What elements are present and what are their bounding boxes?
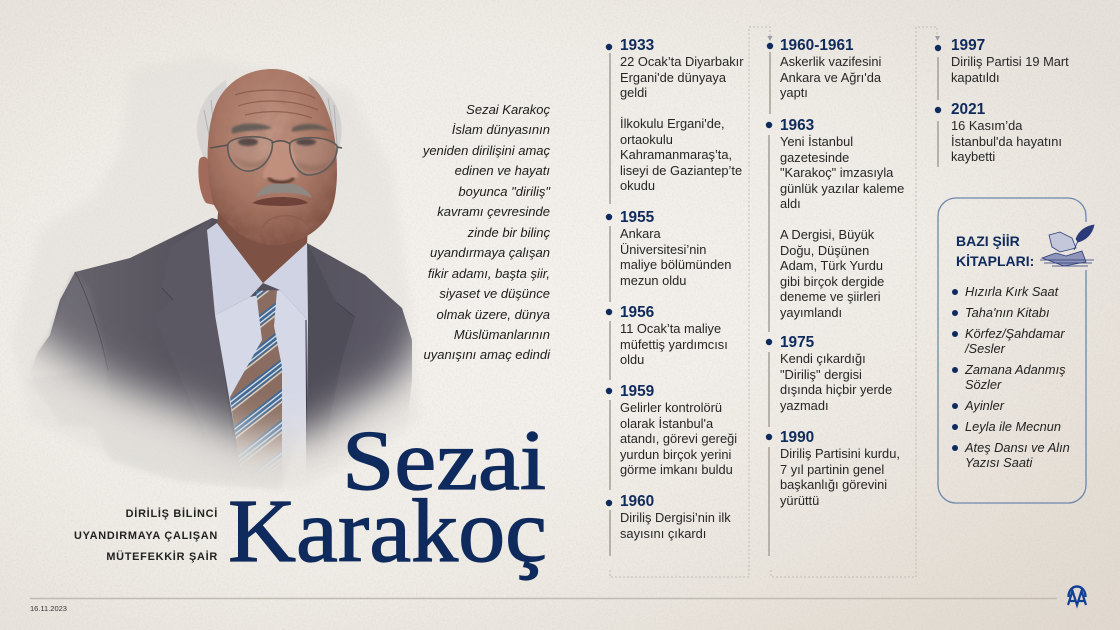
quote text: yeniden dirilişini amaç: [423, 143, 550, 158]
event 1963: aldı: [780, 196, 801, 211]
event 1975: Kendi çıkardığı: [780, 351, 866, 366]
event 1975: yazmadı: [780, 398, 829, 412]
event 1960-1961: Ankara ve Ağrı'da: [780, 70, 881, 84]
panel heading: BAZI ŞİİR: [956, 233, 1020, 249]
event 1956: 11 Ocak’ta maliye: [620, 321, 721, 336]
text: Zamana Adanmış: [965, 362, 1066, 377]
event 1997: [951, 37, 1069, 84]
event 1960-1961: 1960-1961: [780, 37, 854, 54]
event 1959: olarak İstanbul'a: [620, 416, 713, 430]
event 1959: görme imkanı buldu: [620, 462, 733, 477]
event 1990: Diriliş Partisini kurdu,: [780, 446, 900, 461]
event 1990: 1990: [780, 429, 814, 446]
panel heading: [956, 233, 1034, 269]
event 1933: 1933: [620, 37, 654, 54]
quote text: zinde bir bilinç: [468, 225, 550, 240]
quote text: Müslümanlarının: [454, 327, 550, 342]
text: Yazısı Saati: [965, 455, 1032, 470]
event 2021: kaybetti: [951, 149, 995, 164]
quote text: kavramı çevresinde: [437, 204, 550, 219]
event 1933: İlkokulu Ergani'de,: [620, 116, 725, 131]
subtitle: DİRİLİŞ BİLİNCİ: [126, 508, 218, 520]
event 1963: yayımlandı: [780, 304, 842, 320]
event 1933: Ergani'de dünyaya: [620, 70, 726, 84]
event 1963: 1963: [780, 117, 814, 134]
event 1963: Doğu, Düşünen: [780, 242, 869, 258]
text: Taha'nın Kitabı: [965, 305, 1050, 320]
event 1933: liseyi de Gaziantep’te: [620, 162, 742, 178]
event 1933: geldi: [620, 85, 647, 100]
text: Ateş Dansı ve Alın: [965, 440, 1070, 455]
subtitle: [74, 508, 218, 563]
event 1975: "Diriliş" dergisi: [780, 366, 862, 382]
event 1997: Diriliş Partisi 19 Mart: [951, 54, 1069, 69]
event 1963: A Dergisi, Büyük: [780, 227, 874, 242]
text: /Sesler: [965, 341, 1005, 356]
quote text: siyaset ve düşünce: [439, 286, 550, 301]
text: Sözler: [965, 377, 1001, 392]
text: Leyla ile Mecnun: [965, 419, 1061, 434]
event 1956: müfettiş yardımcısı: [620, 336, 728, 352]
event 1960-1961: [780, 37, 881, 100]
event 1963: günlük yazılar kaleme: [780, 180, 904, 196]
quote text: [422, 102, 550, 362]
subtitle: UYANDIRMAYA ÇALIŞAN: [74, 530, 218, 542]
event 1933: 22 Ocak’ta Diyarbakır: [620, 54, 744, 69]
text: Körfez/Şahdamar: [965, 326, 1065, 341]
event 1959: [620, 383, 737, 477]
event 1963: [780, 117, 904, 320]
event 1963: gibi birçok dergide: [780, 274, 884, 288]
event 1955: Ankara: [620, 226, 661, 241]
event 1960: sayısını çıkardı: [620, 526, 706, 540]
event 2021: 16 Kasım’da: [951, 118, 1022, 133]
event 1959: 1959: [620, 383, 654, 400]
event 1975: 1975: [780, 334, 814, 351]
quote text: edinen ve hayatı: [455, 163, 550, 178]
event 1990: başkanlığı görevini: [780, 477, 887, 492]
event 2021: İstanbul'da hayatını: [951, 134, 1062, 148]
portrait of Sezai Karakoç: [32, 69, 412, 468]
event 1963: deneme ve şiirleri: [780, 289, 881, 304]
event 1963: Yeni İstanbul: [780, 134, 853, 149]
quote text: fikir adamı, başta şiir,: [428, 266, 550, 281]
event 1959: Gelirler kontrolörü: [620, 400, 722, 415]
book list: Hızırla Kırk Saat: [965, 284, 1058, 299]
event 1990: 7 yıl partinin genel: [780, 462, 884, 476]
title: Sezai: [342, 412, 546, 508]
text: Ayinler: [965, 398, 1004, 413]
event 1963: gazetesinde: [780, 150, 849, 164]
event 1963: Adam, Türk Yurdu: [780, 258, 883, 273]
quote text: olmak üzere, dünya: [437, 307, 550, 322]
event 1975: [780, 334, 892, 412]
quote text: uyanışını amaç edindi: [424, 347, 550, 362]
event 1959: yurdun birçok yerini: [620, 446, 731, 462]
event 1990: [780, 429, 900, 508]
event 1997: 1997: [951, 37, 985, 54]
event 1955: 1955: [620, 209, 654, 226]
event 2021: [951, 101, 1062, 164]
title: Karakoç: [228, 482, 547, 581]
event 1955: mezun oldu: [620, 272, 686, 288]
subtitle: MÜTEFEKKİR ŞAİR: [106, 551, 218, 563]
event 1955: Üniversitesi’nin: [620, 242, 706, 256]
event 1963: "Karakoç" imzasıyla: [780, 165, 893, 180]
quote text: uyandırmaya çalışan: [430, 245, 550, 260]
quote text: Sezai Karakoç: [466, 102, 550, 117]
quote text: boyunca "diriliş": [458, 184, 550, 199]
event 1960-1961: yaptı: [780, 85, 808, 100]
event 1933: ortaokulu: [620, 132, 673, 146]
event 1975: dışında hiçbir yerde: [780, 382, 892, 397]
event 1960-1961: Askerlik vazifesini: [780, 54, 881, 69]
event 1959: atandı, görevi gereği: [620, 431, 737, 446]
event 1956: oldu: [620, 352, 644, 367]
date: 16.11.2023: [30, 604, 67, 613]
event 1960: 1960: [620, 493, 654, 510]
event 1955: maliye bölümünden: [620, 257, 731, 272]
event 1960: [620, 493, 731, 540]
event 1933: Kahramanmaraş’ta,: [620, 147, 732, 162]
event 1933: [620, 37, 744, 193]
panel heading: KİTAPLARI:: [956, 253, 1034, 269]
event 1997: kapatıldı: [951, 70, 1000, 84]
event 2021: 2021: [951, 101, 985, 118]
event 1956: 1956: [620, 304, 654, 321]
event 1955: [620, 209, 731, 288]
event 1990: yürüttü: [780, 492, 819, 508]
event 1956: [620, 304, 728, 367]
event 1960: Diriliş Dergisi’nin ilk: [620, 510, 731, 525]
event 1933: okudu: [620, 178, 655, 193]
quote text: İslam dünyasının: [452, 122, 550, 137]
